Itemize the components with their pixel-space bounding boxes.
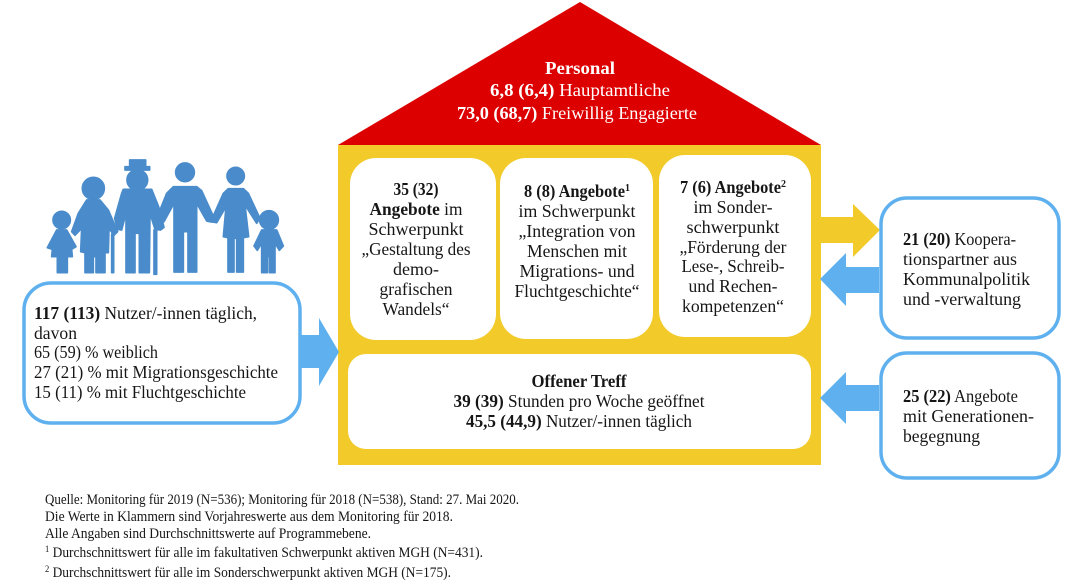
roof heading: Personal xyxy=(545,58,615,78)
arrow: generation encounters to house xyxy=(820,372,879,424)
panel: Generationenbegegnung: 25 (22) Angebote xyxy=(903,386,1018,407)
card: Schwerpunkt demografischer Wandel: demo- xyxy=(393,259,439,279)
panel: Kooperationspartner: Kommunalpolitik xyxy=(903,269,1030,289)
card: Sonderschwerpunkt xyxy=(659,155,811,337)
panel: Kooperationspartner: und -verwaltung xyxy=(903,289,1021,309)
card: Schwerpunkt demografischer Wandel: 35 (32) xyxy=(394,179,438,200)
card: Schwerpunkt Integration: 1 xyxy=(625,182,630,194)
panel: Generationenbegegnung: mit Generationen- xyxy=(903,406,1034,426)
panel: Kooperationspartner: tionspartner aus xyxy=(903,249,1017,269)
panel: Generationenbegegnung: begegnung xyxy=(903,426,980,446)
card: Sonderschwerpunkt: im Sonder- xyxy=(694,197,772,217)
card: Schwerpunkt Integration: 8 (8) Angebote xyxy=(524,181,625,202)
card: Offener Treff xyxy=(348,354,811,449)
card: Sonderschwerpunkt: und Rechen- xyxy=(688,276,778,296)
icon: father, mother, child xyxy=(158,163,283,273)
panel: Nutzer/-innen: 65 (59) % weiblich xyxy=(34,342,158,363)
card: Schwerpunkt Integration: im Schwerpunkt xyxy=(518,201,636,221)
card: Schwerpunkt demografischer Wandel: Schwerpunkt xyxy=(368,219,464,239)
card: Offener Treff: 45,5 (44,9) Nutzer/-innen täglich xyxy=(466,411,692,432)
card: Schwerpunkt demografischer Wandel: „Gestaltung des xyxy=(362,239,470,259)
card: Schwerpunkt Integration: „Integration von xyxy=(518,221,636,241)
roof staff volunteers: 73,0 (68,7) Freiwillig Engagierte xyxy=(457,103,697,124)
source notes: Alle Angaben sind Durchschnittswerte auf Programmebene. xyxy=(45,526,371,542)
card: Schwerpunkt Integration xyxy=(500,158,653,339)
icon: child, grandmother, grandfather xyxy=(47,160,164,274)
card: Schwerpunkt Integration: Menschen mit xyxy=(527,241,627,261)
source notes: Durchschnittswert für alle im fakultativen Schwerpunkt aktiven MGH (N=431). xyxy=(49,545,483,561)
source notes xyxy=(45,492,519,581)
arrow: users into house xyxy=(301,318,339,386)
card: Sonderschwerpunkt: schwerpunkt xyxy=(686,217,780,237)
house body xyxy=(338,145,821,465)
card: Offener Treff: 39 (39) Stunden pro Woche geöffnet xyxy=(454,391,704,412)
card: Schwerpunkt Integration: Fluchtgeschichte“ xyxy=(514,281,640,301)
card: Offener Treff: Offener Treff xyxy=(532,371,627,391)
card: Sonderschwerpunkt: kompetenzen“ xyxy=(682,296,784,316)
panel: Kooperationspartner xyxy=(881,198,1059,338)
arrow: house to cooperation partners xyxy=(821,204,880,257)
card: Sonderschwerpunkt: 7 (6) Angebote xyxy=(680,177,781,198)
panel: Nutzer/-innen: 117 (113) Nutzer/-innen täglich, xyxy=(34,303,257,324)
card: Schwerpunkt demografischer Wandel: Wandels“ xyxy=(382,299,450,319)
panel: Generationenbegegnung xyxy=(881,353,1059,478)
card: Schwerpunkt Integration: Migrations- und xyxy=(520,261,634,281)
panel: Nutzer/-innen xyxy=(24,283,300,423)
panel: Nutzer/-innen: 15 (11) % mit Fluchtgeschichte xyxy=(34,382,246,403)
card: Schwerpunkt demografischer Wandel: grafischen xyxy=(380,279,452,299)
source notes: Durchschnittswert für alle im Sonderschwerpunkt aktiven MGH (N=175). xyxy=(49,565,451,581)
source notes: 2 xyxy=(45,565,49,575)
panel: Nutzer/-innen: 27 (21) % mit Migrationsgeschichte xyxy=(34,362,278,383)
icon: family silhouettes xyxy=(47,160,283,274)
source notes: 1 xyxy=(45,545,49,555)
source notes: Die Werte in Klammern sind Vorjahreswerte aus dem Monitoring für 2018. xyxy=(45,509,453,525)
panel: Nutzer/-innen: davon xyxy=(34,323,77,343)
card: Sonderschwerpunkt: „Förderung der xyxy=(680,237,786,257)
panel: Kooperationspartner: 21 (20) Koopera- xyxy=(903,229,1016,250)
house roof: Personal xyxy=(338,2,821,145)
card: Sonderschwerpunkt: Lese-, Schreib- xyxy=(682,256,785,276)
card: Sonderschwerpunkt: 2 xyxy=(781,178,786,190)
card: Schwerpunkt demografischer Wandel xyxy=(350,158,496,340)
arrow: cooperation partners to house xyxy=(820,253,879,306)
source notes: Quelle: Monitoring für 2019 (N=536); Monitoring für 2018 (N=538), Stand: 27. Mai 2020. xyxy=(45,492,519,508)
roof staff full-time: 6,8 (6,4) Hauptamtliche xyxy=(490,80,670,101)
card: Schwerpunkt demografischer Wandel: Angebote im xyxy=(370,199,462,219)
